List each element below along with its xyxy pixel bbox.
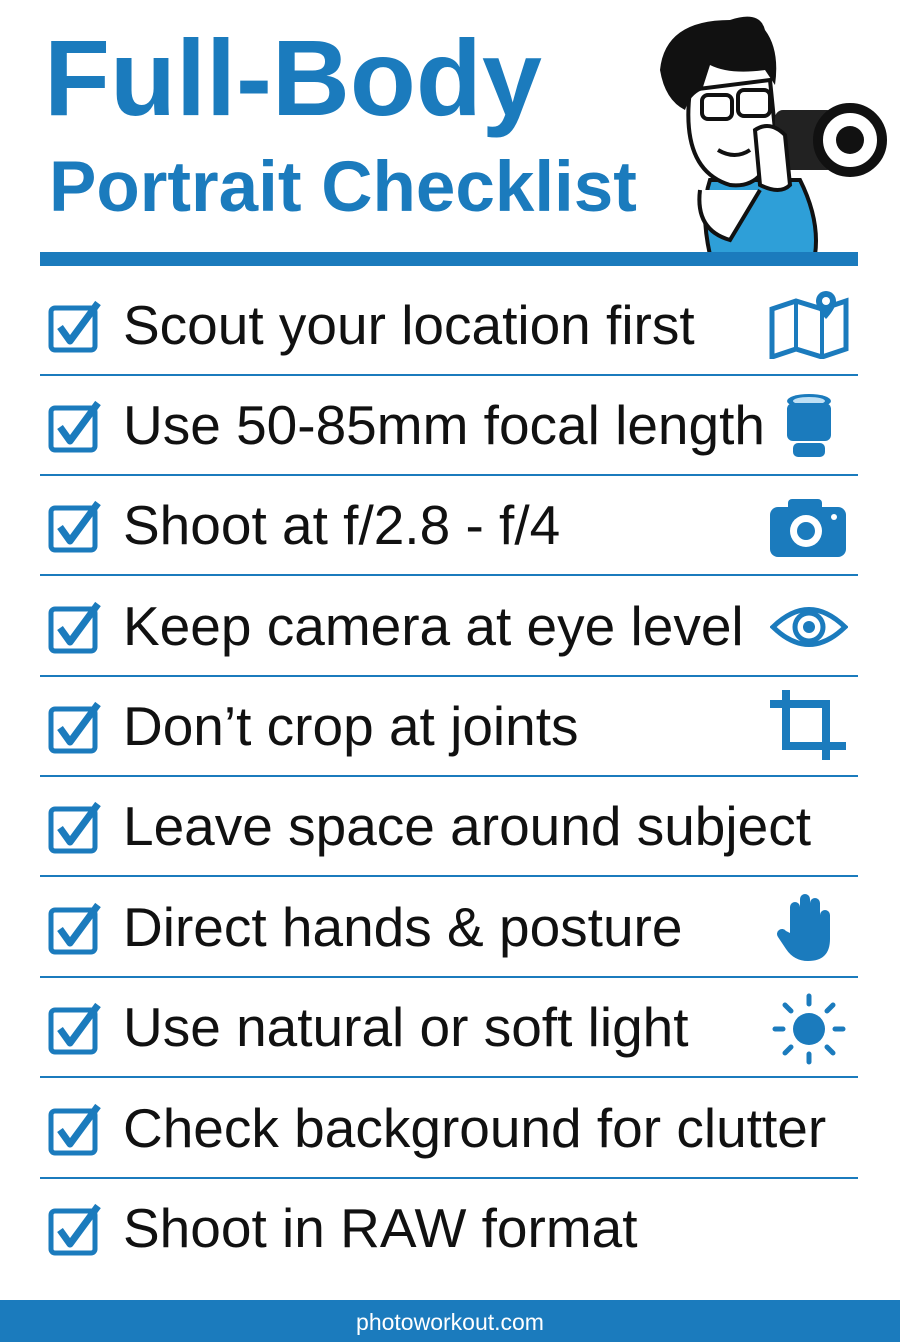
icon: hand xyxy=(777,894,830,961)
icon: sun xyxy=(772,994,846,1064)
illustration: photographer cartoon xyxy=(660,16,887,252)
footer xyxy=(0,1300,900,1342)
item 9: Check background for clutter xyxy=(123,1097,826,1159)
icon: map xyxy=(770,291,848,359)
footer: photoworkout.com xyxy=(356,1309,544,1335)
item 5: Don’t crop at joints xyxy=(123,695,578,757)
icon: lens xyxy=(787,394,831,457)
item 1 xyxy=(48,291,848,359)
item 8: Use natural or soft light xyxy=(123,996,689,1058)
item 5 xyxy=(48,690,846,760)
divider bar xyxy=(40,252,858,266)
item 8 xyxy=(48,994,846,1064)
item 1: Scout your location first xyxy=(123,294,695,356)
item 7 xyxy=(48,894,830,961)
subtitle: Portrait Checklist xyxy=(49,148,637,227)
item 10: Shoot in RAW format xyxy=(123,1197,638,1259)
icon: crop xyxy=(770,690,846,760)
item 3: Shoot at f/2.8 - f/4 xyxy=(123,494,560,556)
item 3 xyxy=(48,494,846,557)
icon: eye xyxy=(770,607,848,647)
item 6: Leave space around subject xyxy=(123,795,811,857)
item 4: Keep camera at eye level xyxy=(123,595,744,657)
icon: camera xyxy=(770,499,846,557)
item 2: Use 50-85mm focal length xyxy=(123,394,765,456)
item 7: Direct hands & posture xyxy=(123,896,682,958)
title: Full-Body xyxy=(44,17,542,138)
